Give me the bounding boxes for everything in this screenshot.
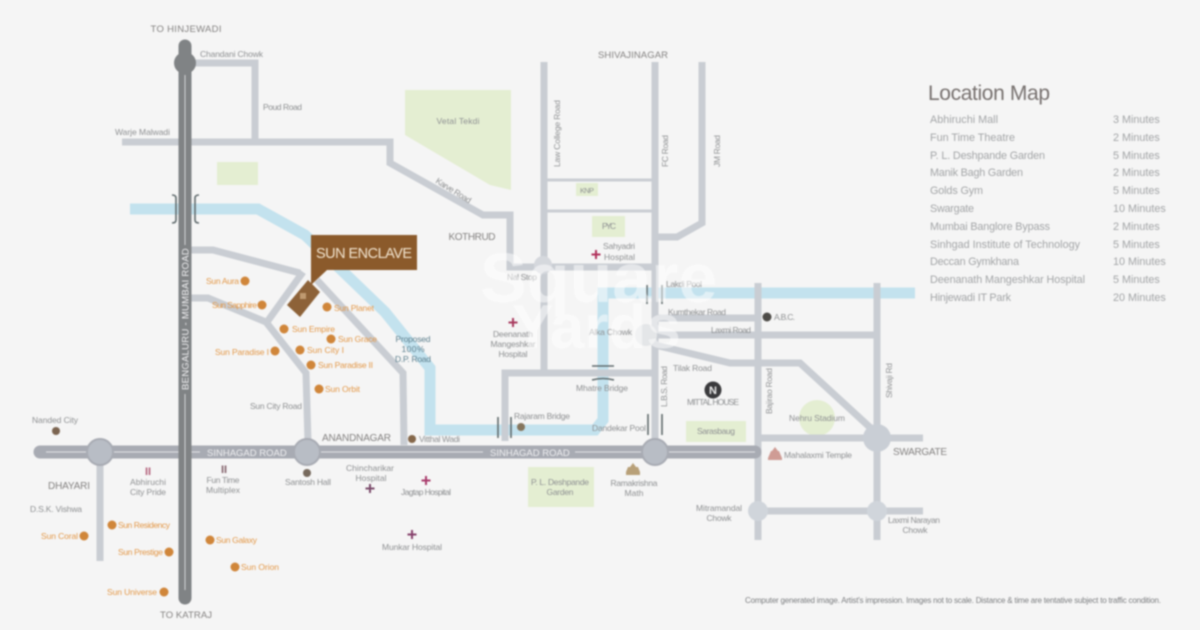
label: Swargate: SWARGATE: [893, 447, 947, 458]
park: P. L. Deshpande Garden: [528, 467, 594, 507]
watermark line 2: Yards: [512, 293, 681, 362]
road: Law College Road: [540, 62, 548, 372]
label: Mahalaxmi Temple: Mahalaxmi Temple: [784, 450, 852, 460]
label: FC Road: FC Road: [660, 135, 670, 167]
label: Shivaji Rd: Shivaji Rd: [884, 363, 894, 398]
row: Sinhgad Institute of Technology: [930, 239, 1160, 251]
place: Swargate: [930, 203, 974, 215]
bridge: Lakdi Pool: [647, 285, 662, 304]
line 2: Chowk: [706, 513, 732, 523]
label: Sun Grace: Sun Grace: [338, 334, 377, 344]
label: Bajirao Road: Bajirao Road: [764, 368, 774, 414]
road: connector near PYC: [547, 210, 652, 212]
label: Deenanath Mangeshkar Hospital: [490, 329, 536, 359]
time: 20 Minutes: [1113, 292, 1166, 304]
row: Golds Gym: [930, 185, 1160, 197]
row: Deccan Gymkhana: [930, 256, 1166, 268]
label: Kothrud: KOTHRUD: [448, 232, 496, 243]
time: 10 Minutes: [1113, 203, 1166, 215]
place: Deenanath Mangeshkar Hospital: [930, 274, 1085, 286]
marker: Vitthal Wadi: [408, 435, 416, 443]
label: Sun Coral: Sun Coral: [41, 531, 78, 541]
orange project labels: [41, 276, 377, 597]
line 1: Sahyadri: [603, 241, 635, 251]
label: Shivajinagar: SHIVAJINAGAR: [598, 50, 668, 61]
label: Munkar Hospital: Munkar Hospital: [382, 542, 442, 552]
marker: Fun Time Multiplex: II: [221, 464, 227, 476]
row: Fun Time Theatre: [930, 132, 1160, 144]
panel: location list: [928, 82, 1166, 304]
row: Abhiruchi Mall: [930, 114, 1160, 126]
place: Abhiruchi Mall: [930, 114, 998, 126]
line 3: D.P. Road: [395, 354, 431, 364]
label: Fun Time Multiplex: [206, 475, 241, 495]
label: JM Road: JM Road: [712, 135, 722, 167]
label: PYC: PYC: [602, 221, 616, 231]
orange project dots: [80, 276, 336, 596]
label: Laxmi Road: Laxmi Road: [711, 325, 751, 335]
line 1: Mitramandal: [696, 503, 742, 513]
road: Kumthekar Road: [655, 314, 758, 322]
label: Sun Planet: Sun Planet: [334, 303, 375, 313]
row: Hinjewadi IT Park: [930, 292, 1166, 304]
dot: Sun Paradise II: [306, 360, 316, 370]
label: Sun Paradise I: Sun Paradise I: [215, 347, 269, 357]
main road: Sinhagad Road: [40, 448, 755, 459]
place markers: [52, 312, 782, 478]
label: Warje Malwadi: Warje Malwadi: [115, 127, 170, 137]
cross: Jagtap Hospital: [422, 476, 430, 485]
dot: Sun Paradise I: [270, 346, 280, 356]
label: Sun Prestige: Sun Prestige: [118, 547, 163, 557]
label: Sahyadri Hospital: [603, 241, 635, 262]
label: Vitthal Wadi: Vitthal Wadi: [419, 434, 460, 444]
label: Nal Stop: Nal Stop: [507, 272, 537, 282]
line 1: Chincharikar: [346, 463, 394, 473]
marker: Santosh Hall: [303, 469, 311, 477]
cross: Munkar Hospital: [408, 530, 416, 539]
junction: Alka Chowk: [635, 324, 657, 346]
label: Ramakrishna Math: [610, 478, 658, 498]
cross: Chincharikar Hospital: [366, 484, 374, 493]
label: Abhiruchi City Pride: [130, 477, 166, 497]
road: D.S.K. Vishwa: [96, 460, 104, 561]
label: Vetal Tekdi: Vetal Tekdi: [436, 116, 480, 126]
line 2: City Pride: [130, 487, 166, 497]
project marker: Sun Enclave: [287, 235, 417, 317]
label: Anandnagar: ANANDNAGAR: [322, 433, 391, 444]
junction: Chandani Chowk: [174, 52, 196, 74]
park: KNP: [576, 183, 598, 196]
parks and green areas: [217, 90, 835, 507]
mittal badge: [704, 382, 722, 398]
label: Sun Residency: Sun Residency: [118, 520, 171, 530]
road centre line: [46, 451, 755, 453]
time: 2 Minutes: [1113, 221, 1160, 233]
dot: Sun Universe: [160, 588, 168, 596]
road: Laxmi Road: [655, 332, 877, 338]
label: Jagtap Hospital: Jagtap Hospital: [401, 487, 451, 497]
roundabout Dandekar: [642, 439, 668, 465]
label: Chandani Chowk: Chandani Chowk: [200, 49, 264, 59]
line 2: Math: [624, 488, 644, 498]
time: 2 Minutes: [1113, 132, 1160, 144]
label: Karve Road: Karve Road: [434, 176, 473, 205]
bridge over canal at highway: [172, 195, 199, 223]
label: Kumthekar Road: Kumthekar Road: [668, 307, 726, 317]
hospital crosses: [366, 250, 600, 539]
watermark: [480, 239, 717, 362]
park: Nehru Stadium: [799, 400, 835, 436]
label: Sun Empire: Sun Empire: [292, 324, 335, 334]
icon: Mahalaxmi Temple: [768, 447, 782, 460]
label: Nehru Stadium: Nehru Stadium: [789, 413, 845, 423]
road: Bajirao Road: [754, 283, 762, 540]
minor road network: [100, 62, 923, 561]
line 1: Ramakrishna: [610, 478, 658, 488]
highway band: [178, 46, 192, 598]
site plot mark: [300, 293, 306, 299]
main highway: Bengaluru - Mumbai Road: [174, 46, 196, 598]
road: Mhatre Bridge road: [505, 373, 655, 441]
time: 2 Minutes: [1113, 167, 1160, 179]
highway centre line: [184, 75, 186, 590]
time: 10 Minutes: [1113, 256, 1166, 268]
label: Mhatre Bridge: Mhatre Bridge: [576, 383, 628, 393]
place: Manik Bagh Garden: [930, 167, 1023, 179]
junction: Mitramandal Chowk: [748, 501, 768, 521]
dot: Sun Galaxy: [206, 536, 214, 544]
label: Sun City Road: Sun City Road: [250, 401, 302, 411]
line 2: 100%: [402, 344, 425, 354]
bridge: Dandekar Pool: [648, 414, 662, 435]
line 2: Hospital: [356, 473, 387, 483]
road: Sun City Road: [190, 298, 308, 442]
place: Golds Gym: [930, 185, 983, 197]
line 1: Laxmi Narayan: [888, 515, 940, 525]
label: D.S.K. Vishwa: D.S.K. Vishwa: [30, 504, 82, 514]
roundabouts on Sinhagad Road: [87, 439, 668, 465]
icon: Ramakrishna Math temple: [626, 463, 640, 475]
label: Sun Galaxy: Sun Galaxy: [216, 535, 258, 545]
park: Vetal Tekdi: [405, 90, 511, 190]
row: Manik Bagh Garden: [930, 167, 1160, 179]
map labels: [30, 24, 947, 621]
marker: Mittal House: [704, 382, 722, 398]
label: Sun Orbit: Sun Orbit: [325, 384, 361, 394]
park: PYC: [592, 216, 625, 237]
roundabout west: [87, 439, 113, 465]
line 1: Abhiruchi: [130, 477, 166, 487]
label: P. L. Deshpande Garden: [531, 477, 589, 497]
callout name: SUN ENCLAVE: [316, 246, 412, 262]
bridges: [172, 195, 662, 438]
dot: Sun Sapphire: [258, 300, 266, 310]
label: A.B.C.: A.B.C.: [774, 312, 795, 322]
mittal initial: N: [709, 385, 717, 397]
label: Sun Sapphire: Sun Sapphire: [212, 300, 257, 310]
dot: Sun Aura: [240, 276, 250, 286]
label: Law College Road: Law College Road: [552, 100, 562, 167]
time: 3 Minutes: [1113, 114, 1160, 126]
callout box: [311, 235, 417, 285]
road: connector near KNP: [547, 178, 652, 182]
label: KNP: KNP: [580, 186, 594, 195]
row: Deenanath Mangeshkar Hospital: [930, 274, 1160, 286]
road: upper west branch: [190, 250, 300, 273]
highway name: BENGALURU - MUMBAI ROAD: [180, 248, 192, 390]
dot: Sun Residency: [108, 520, 116, 530]
label: To Katraj: TO KATRAJ: [160, 610, 212, 621]
watermark line 1: Square: [480, 239, 717, 317]
dot: Sun Prestige: [164, 548, 174, 556]
label: Sun Orion: Sun Orion: [241, 562, 279, 572]
line 2: Multiplex: [206, 485, 241, 495]
road name west: SINHAGAD ROAD: [207, 448, 287, 459]
label: Mitramandal Chowk: [696, 503, 742, 523]
junctions: light roundabouts: [534, 256, 891, 521]
road band: [40, 446, 755, 458]
road: Swargate link: [758, 434, 923, 442]
marker: Nanded City: [52, 427, 60, 435]
road: east branch: [317, 280, 404, 445]
dot: Sun Empire: [280, 324, 288, 334]
label: Sarasbaug: Sarasbaug: [697, 426, 735, 436]
place: Fun Time Theatre: [930, 132, 1015, 144]
junction: Swargate: [863, 424, 891, 452]
row: P. L. Deshpande Garden: [930, 150, 1160, 162]
label: Poud Road: Poud Road: [263, 102, 302, 112]
label: Mittal House: MITTAL HOUSE: [687, 397, 739, 407]
label: Sun City I: Sun City I: [307, 345, 344, 355]
marker: A.B.C.: [762, 312, 772, 322]
line 2: Hospital: [604, 252, 635, 262]
road name east: SINHAGAD ROAD: [490, 448, 570, 459]
label: Rajaram Bridge: Rajaram Bridge: [514, 411, 570, 421]
time: 5 Minutes: [1113, 274, 1160, 286]
heading: Location Map: Location Map: [928, 82, 1050, 105]
dot: Sun Orion: [230, 562, 240, 572]
label: Lakdi Pool: Lakdi Pool: [666, 279, 702, 289]
dot: Sun Coral: [80, 532, 88, 540]
footnote disclaimer: Computer generated image. Artist's impression. Images not to scale. Distance & time are tentative subject to traffic condition.: [745, 596, 1161, 605]
dot: Sun Orbit: [314, 384, 324, 394]
dot: Sun Grace: [326, 334, 336, 344]
label: Proposed 100% D.P. Road: [395, 334, 431, 364]
label: Dhayari: DHAYARI: [48, 481, 90, 492]
row: Swargate: [930, 203, 1166, 215]
road: site connector: [267, 272, 303, 322]
road: Shivaji Road: [874, 283, 880, 540]
time: 5 Minutes: [1113, 150, 1160, 162]
label: Chincharikar Hospital: [346, 463, 394, 483]
junction: Laxmi Narayan Chowk: [867, 501, 887, 521]
place: P. L. Deshpande Garden: [930, 150, 1045, 162]
canal: water channel: [130, 209, 915, 430]
junction: Nal Stop: [534, 256, 552, 274]
label: Sun Paradise II: Sun Paradise II: [318, 360, 373, 370]
place: Hinjewadi IT Park: [930, 292, 1012, 304]
label: Dandekar Pool: Dandekar Pool: [592, 423, 646, 433]
label: Alka Chowk: Alka Chowk: [589, 327, 633, 337]
road: Tilak Road: [655, 345, 875, 432]
road: Mitramandal to Laxmi Narayan link: [758, 508, 923, 514]
bridge: Mhatre Bridge: [592, 366, 614, 380]
marker: Abhiruchi City Pride: II: [145, 466, 151, 478]
place: Mumbai Banglore Bypass: [930, 221, 1051, 233]
row: Mumbai Banglore Bypass: [930, 221, 1160, 233]
road: Paud Road from Chandani Chowk: [190, 63, 255, 140]
cross: Deenanath Mangeshkar Hospital: [508, 318, 518, 327]
label: Sun Universe: Sun Universe: [107, 587, 157, 597]
park: unnamed green block: [217, 162, 258, 185]
label: Sun Aura: Sun Aura: [206, 276, 239, 286]
line 3: Hospital: [498, 349, 528, 359]
line 1: Deenanath: [493, 329, 533, 339]
label: L.B.S. Road: L.B.S. Road: [659, 366, 669, 407]
site plot: [287, 280, 320, 317]
road: FC and LBS Road: [652, 62, 658, 440]
marker: Rajaram Bridge: [517, 423, 525, 431]
roundabout Anandnagar: [294, 439, 320, 465]
line 1: P. L. Deshpande: [531, 477, 589, 487]
time: 5 Minutes: [1113, 239, 1160, 251]
line 2: Garden: [546, 487, 574, 497]
road: Warje Malwadi and Karve Road: [122, 142, 655, 267]
line 1: Fun Time: [206, 475, 240, 485]
label: Santosh Hall: Santosh Hall: [285, 477, 331, 487]
label: Nanded City: Nanded City: [32, 415, 79, 425]
dot: Sun Planet: [322, 302, 332, 312]
line 2: Chowk: [902, 525, 928, 535]
time: 5 Minutes: [1113, 185, 1160, 197]
dot: Sun City I: [296, 346, 304, 354]
line 2: Mangeshkar: [490, 339, 536, 349]
label: Tilak Road: Tilak Road: [673, 363, 712, 373]
label: To Hinjewadi: TO HINJEWADI: [150, 24, 222, 35]
line 1: Proposed: [396, 334, 431, 344]
place: Deccan Gymkhana: [930, 256, 1019, 268]
road: JM Road: [658, 62, 702, 237]
bridge: Rajaram Bridge: [498, 417, 511, 438]
park: Sarasbaug: [686, 421, 746, 442]
place: Sinhgad Institute of Technology: [930, 239, 1081, 251]
label: Laxmi Narayan Chowk: [888, 515, 940, 535]
cross: Sahyadri Hospital: [592, 250, 600, 259]
